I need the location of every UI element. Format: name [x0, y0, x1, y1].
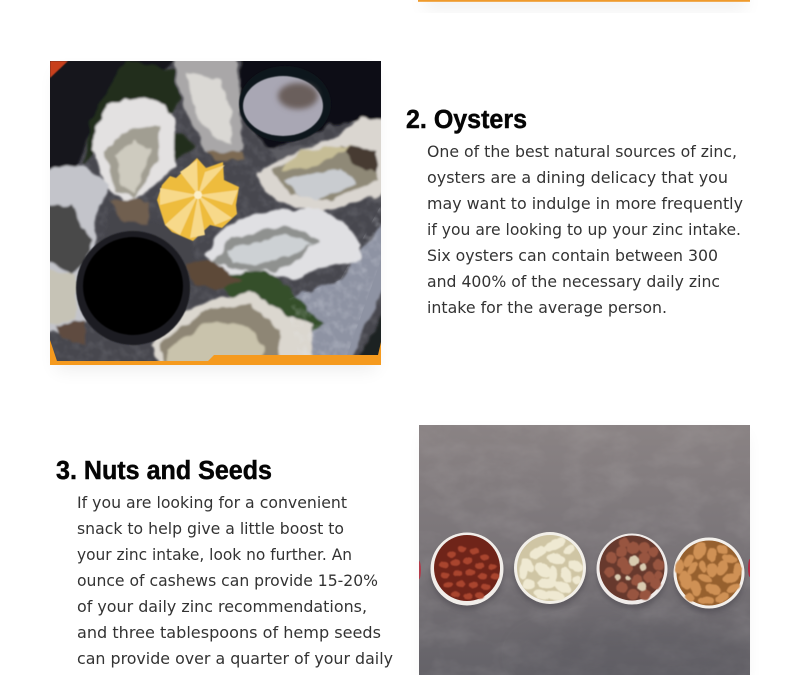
- oyster right upper: [258, 118, 395, 212]
- bowl: cashews: [514, 532, 586, 604]
- text block: nuts and seeds description: [77, 493, 393, 668]
- text block: oysters description: may want to indulge in more frequently: [427, 194, 743, 213]
- oyster bottom: [150, 289, 315, 361]
- bowl: peanuts: [430, 532, 504, 606]
- heading: 2. Oysters: 2. Oysters: [406, 106, 527, 134]
- previous section image bottom edge: [418, 0, 750, 10]
- text block: oysters description: [427, 142, 743, 317]
- text block: oysters description: and 400% of the necessary daily zinc: [427, 272, 720, 291]
- bowl: almonds: [674, 538, 744, 608]
- bowl: hazelnuts: [596, 534, 668, 604]
- oyster upper left: [92, 96, 176, 205]
- text block: nuts and seeds description: ounce of cashews can provide 15-20%: [77, 571, 378, 590]
- text block: nuts and seeds description: and three tablespoons of hemp seeds: [77, 623, 381, 642]
- oyster left: [50, 163, 110, 334]
- nuts and seeds photo panel: [417, 425, 760, 675]
- oyster right lower: [205, 208, 362, 280]
- greens: [85, 61, 195, 165]
- text block: oysters description: Six oysters can contain between 300: [427, 246, 718, 265]
- text block: nuts and seeds description: If you are looking for a convenient: [77, 493, 347, 512]
- text block: nuts and seeds description: of your daily zinc recommendations,: [77, 597, 367, 616]
- oyster top middle: [173, 58, 243, 160]
- text block: nuts and seeds description: your zinc intake, look no further. An: [77, 545, 352, 564]
- heading: 3. Nuts and Seeds: 3. Nuts and Seeds: [56, 457, 272, 485]
- oysters photo panel: [50, 61, 381, 370]
- text block: oysters description: intake for the average person.: [427, 298, 667, 317]
- text block: nuts and seeds description: snack to help give a little boost to: [77, 519, 344, 538]
- tray: [50, 61, 173, 170]
- text block: oysters description: if you are looking to up your zinc intake.: [427, 220, 741, 239]
- sauce bowl: [76, 231, 190, 345]
- text block: oysters description: One of the best natural sources of zinc,: [427, 142, 737, 161]
- orange red corner: [50, 61, 68, 78]
- ice highlight: [290, 207, 381, 355]
- red edge accents: [419, 561, 421, 579]
- text block: nuts and seeds description: can provide over a quarter of your daily: [77, 649, 393, 668]
- salt bowl: [239, 66, 331, 142]
- text block: oysters description: oysters are a dining delicacy that you: [427, 168, 728, 187]
- bowl shadows: [430, 566, 504, 610]
- lemon: [157, 158, 239, 241]
- orange corner trim: [50, 340, 381, 365]
